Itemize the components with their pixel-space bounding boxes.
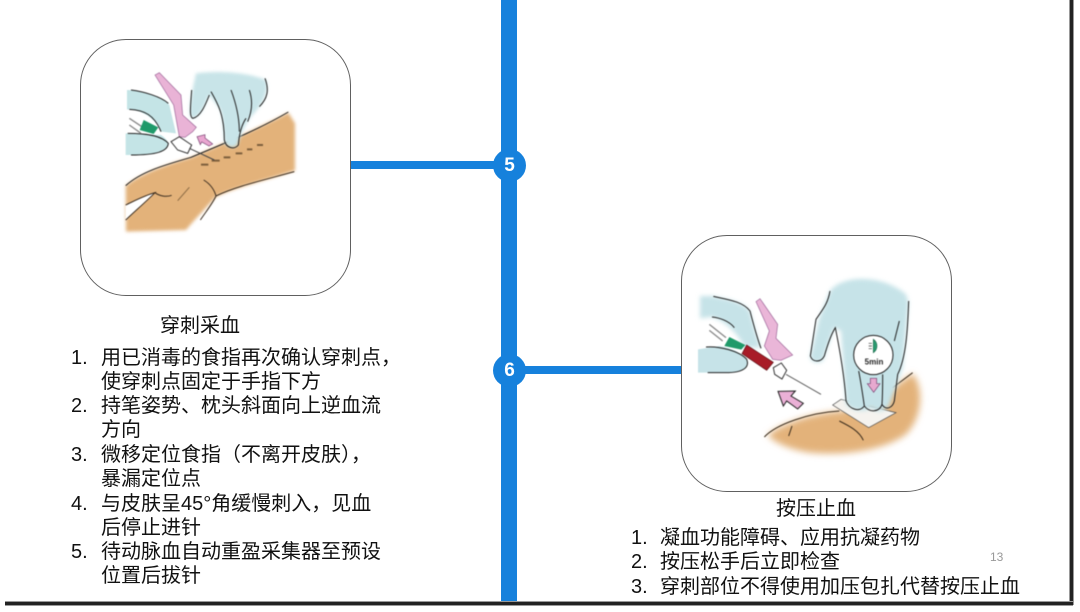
text block: puncture steps: 1. [71,347,88,369]
needle hub [171,137,192,153]
text block: compression notes: 1. [631,527,648,549]
text block: puncture steps: 方向 [101,419,141,441]
gloved upper fingers [700,296,761,348]
text block: puncture steps [71,346,401,587]
holder green [140,120,158,134]
skin [768,374,920,454]
pressing glove [810,279,909,411]
pink butterfly guard [155,73,196,137]
gauze [833,399,896,428]
pink guard [756,299,793,360]
text block: compression notes: 穿刺部位不得使用加压包扎代替按压止血 [660,576,1020,598]
step badge 5: 5 [504,155,515,176]
heading: 按压止血: 按压止血 [776,498,856,520]
illustration: pressing gauze for 5 minutes [698,276,925,458]
text block: puncture steps: 后停止进针 [101,517,201,539]
text block: puncture steps: 用已消毒的食指再次确认穿刺点， [101,347,401,369]
glove right [190,72,267,147]
heading: 穿刺采血: 穿刺采血 [160,315,240,337]
text block: puncture steps: 暴漏定位点 [101,468,201,490]
green cap [724,337,745,350]
glove left lower fingers [126,133,168,155]
text block: puncture steps: 待动脉血自动重盈采集器至预设 [101,541,381,563]
timeline: vertical blue bar with connectors [351,0,681,601]
text block: puncture steps: 微移定位食指（不离开皮肤）， [101,444,371,466]
step badge 6: 6 [504,360,515,381]
5min label: 5min [865,357,883,366]
text block: compression notes: 凝血功能障碍、应用抗凝药物 [660,527,920,549]
text block: puncture steps: 与皮肤呈45°角缓慢刺入，见血 [101,493,371,515]
text block: puncture steps: 5. [71,541,88,563]
pink arrow [778,391,803,409]
step badge 6 [493,354,526,387]
illustration: gloved hands puncturing the wrist [123,70,298,234]
arm [126,113,295,232]
hub [773,363,787,379]
red tube [742,345,773,370]
down arrow [867,378,880,392]
pink arrow [197,135,213,146]
glove left upper fingers [127,90,176,133]
text block: compression notes: 2. [631,551,648,573]
text block: puncture steps: 使穿刺点固定于手指下方 [101,371,321,393]
text block: compression notes: 3. [631,576,648,598]
timer circle [854,335,893,375]
text block: puncture steps: 位置后拔针 [101,565,201,587]
text block: compression notes [631,526,1020,598]
panel: compression illustration card [681,235,952,492]
panel: puncture illustration card [80,39,351,296]
text block: puncture steps: 2. [71,395,88,417]
step badge 5 [493,149,526,182]
page number: 13 [990,550,1003,564]
text block: puncture steps: 持笔姿势、枕头斜面向上逆血流 [101,395,381,417]
text block: puncture steps: 4. [71,493,88,515]
text block: compression notes: 按压松手后立即检查 [660,551,840,573]
gloved lower fingers [698,346,747,373]
text block: puncture steps: 3. [71,444,88,466]
